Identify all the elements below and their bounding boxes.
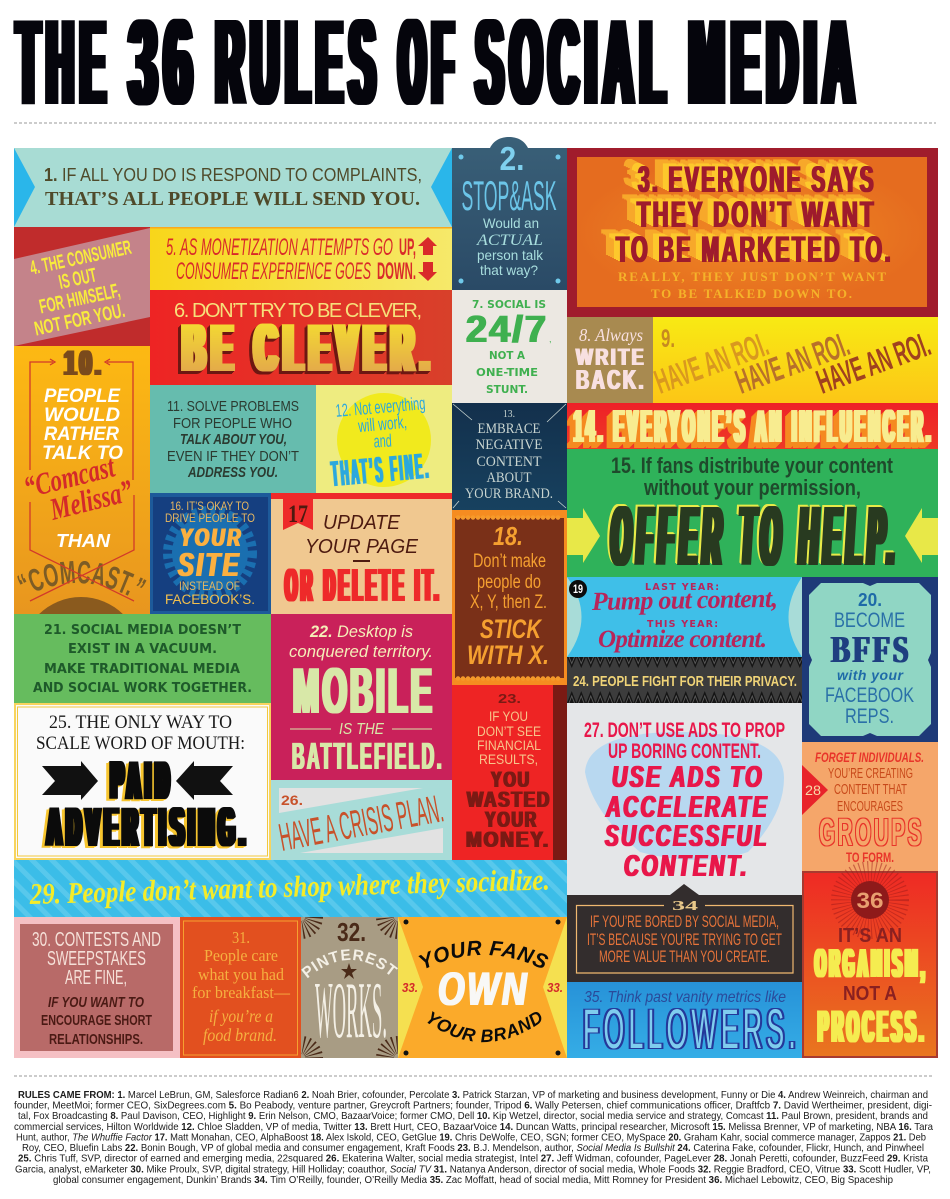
text: rule 34: 34 xyxy=(672,899,698,914)
panel: rule 30 xyxy=(14,917,180,1058)
text: rule 20: REPS. xyxy=(845,705,894,728)
text: rule 11: FOR PEOPLE WHO xyxy=(173,416,292,432)
text: rule 18: Don’t make xyxy=(473,551,546,572)
text: rule 10: “COMCAST.” xyxy=(17,561,146,596)
panel: rule 19 xyxy=(567,577,802,657)
sunburst badge: 36 xyxy=(856,888,884,913)
text: rule 1: 1. IF ALL YOU DO IS RESPOND TO COMPLAINTS, xyxy=(44,165,422,185)
text: rule 11: TALK ABOUT YOU, xyxy=(180,432,287,448)
starburst xyxy=(168,511,252,595)
text: rule 10: “Comcast xyxy=(20,448,119,505)
text: rule 31: if you’re a xyxy=(209,1006,273,1026)
credits text block: 25. Chris Tuff, SVP, director of earned and emerging media, 22squared 26. Ekaterina Walter, social media strategist, Intel 27. Jeff Widman, cofounder, PageLever 28. Jonah Peretti, cofounder, BuzzFeed 29. Krista xyxy=(18,1154,928,1165)
text: rule 16: 16. IT’S OKAY TO xyxy=(170,501,249,513)
crossed-out lines xyxy=(30,495,134,601)
text: rule 5 xyxy=(166,234,416,285)
panel: rule 26 xyxy=(271,780,452,860)
text: rule 32 xyxy=(301,917,398,1055)
text: rule 23 xyxy=(466,691,551,852)
text: rule 33: YOUR BRAND xyxy=(427,1011,542,1042)
text: rule 10: PEOPLE xyxy=(44,385,121,407)
credits text block: RULES CAME FROM: 1. Marcel LeBrun, GM, Salesforce Radian6 2. Noah Brier, cofounder, Percolate 3. Patrick Starzan, VP of marketing and business development, Funny or Die 4. Andrew Weinreich, chairman and xyxy=(18,1090,928,1101)
text: rule 26: 26. xyxy=(281,792,303,808)
text: rule 17 xyxy=(285,512,442,611)
credits text block: Garcia, analyst, eMarketer 30. Mike Proulx, SVP, digital strategy, Hill Holliday; coauthor, Social TV 31. Natanya Anderson, director of social media, Whole Foods 32. Reggie Bradford, CEO, Vitrue 33. Scott Hudler, VP, xyxy=(15,1164,931,1175)
text: rule 30 xyxy=(32,929,161,1048)
dots xyxy=(404,920,560,1056)
panel: rule 36 xyxy=(802,871,938,1058)
panel: rule 11 xyxy=(150,385,316,493)
text: rule 16: INSTEAD OF xyxy=(179,581,240,593)
text: rule 21 xyxy=(33,622,252,696)
text: rule 13: NEGATIVE xyxy=(476,437,542,453)
text: rule 2: ACTUAL xyxy=(476,232,543,249)
text: rule 33: 33. xyxy=(547,980,563,995)
text: ADVERTISING. xyxy=(47,795,250,858)
text: rule 18: WITH X. xyxy=(467,640,549,670)
text: rule 30: SWEEPSTAKES xyxy=(47,948,146,970)
text: rule 12: and xyxy=(373,431,392,451)
text: rule 30: RELATIONSHIPS. xyxy=(49,1031,143,1048)
icon: up arrow xyxy=(418,237,437,255)
text: rule 7: NOT A xyxy=(489,349,525,362)
text: rule 18: 18. xyxy=(493,521,523,551)
icon: left arrow xyxy=(176,761,233,800)
panel: rule 21 xyxy=(14,614,271,703)
panel: rule 6 xyxy=(150,290,452,386)
text: HAVE A CRISIS PLAN. xyxy=(276,787,447,860)
text: rule 31 xyxy=(192,928,291,1045)
text: rule 34 xyxy=(587,899,782,966)
text: rule 2: that way? xyxy=(480,262,538,278)
text: rule 27 xyxy=(584,719,785,883)
text: rule 23: IF YOU xyxy=(489,709,528,724)
heading: rule 3 xyxy=(616,159,893,270)
panel: rule 13 xyxy=(452,403,567,510)
panel: rule 32 xyxy=(301,917,398,1058)
text: rule 4: FOR HIMSELF, xyxy=(37,280,122,318)
text: rule 2: Would an xyxy=(483,215,539,231)
icon: right arrow xyxy=(42,761,98,800)
text: rule 22: MOBILE xyxy=(293,654,435,727)
text: rule 34: IF YOU’RE BORED BY SOCIAL MEDIA, xyxy=(590,912,779,931)
text: rule 32: 32. xyxy=(337,917,366,947)
text: rule 7: 7. SOCIAL IS xyxy=(472,298,546,311)
text: rule 23: DON’T SEE xyxy=(477,724,541,739)
text: rule 11: ADDRESS YOU. xyxy=(187,465,278,481)
frame arrows xyxy=(30,359,133,480)
icon: right arrow xyxy=(905,508,938,563)
text: rule 19: LAST YEAR: xyxy=(645,582,719,593)
text: rule 15 lead: without your permission, xyxy=(643,475,861,500)
text: rule 12 xyxy=(330,393,432,494)
text: rule 19: Optimize content. xyxy=(598,626,767,653)
panel: rule 10 xyxy=(14,344,150,614)
text: rule 28: ENCOURAGES xyxy=(837,798,903,815)
text: rule 27: ACCELERATE xyxy=(605,789,769,824)
text: rule 26 xyxy=(276,787,447,860)
text: rule 27: 27. DON’T USE ADS TO PROP xyxy=(584,719,785,742)
text: rule 30: 30. CONTESTS AND xyxy=(32,929,161,951)
panel: rule 17 xyxy=(271,493,452,614)
text: rule 33: YOUR FANS xyxy=(418,940,548,968)
panel: rule 18 xyxy=(452,510,567,685)
text: rule 36: IT’S AN xyxy=(838,925,902,947)
text: THAT’S FINE. xyxy=(330,445,432,494)
badge: 19 xyxy=(569,580,587,598)
text: rule 7: STUNT. xyxy=(486,383,528,396)
text: rule 21: EXIST IN A VACUUM. xyxy=(68,641,217,657)
text: rule 16: DRIVE PEOPLE TO xyxy=(165,513,255,525)
text: rule 31: 31. xyxy=(232,928,250,947)
credits text block: Hunt, author, The Whuffie Factor 17. Matt Monahan, CEO, AlphaBoost 18. Alex Iskold, CEO, GetGlue 19. Chris DeWolfe, CEO, SGN; former CEO, MySpace 20. Graham Kahr, social commerce manager, Zappos 21. Deb xyxy=(16,1132,926,1144)
text: rule 23: MONEY. xyxy=(466,827,550,852)
text: rule 27: SUCCESSFUL xyxy=(605,818,769,853)
text: rule 10: THAN xyxy=(56,531,111,551)
subtext: rule 3: TO BE TALKED DOWN TO. xyxy=(651,286,852,301)
text: rule 30: ARE FINE, xyxy=(65,967,127,989)
text: rule 23: FINANCIAL xyxy=(477,738,541,753)
badge: 19: 19 xyxy=(573,582,583,596)
text: rule 2: person talk xyxy=(477,247,544,263)
credits text block: global consumer engagement, Dunkin’ Brands 34. Tim O’Reilly, founder, O’Reilly Media 35. Zac Moffatt, head of social media, Mitt Romney for President 36. Michael Lebowitz, CEO, Big Spaceship xyxy=(53,1175,893,1186)
text: rule 6 lead: 6. DON’T TRY TO BE CLEVER, xyxy=(174,300,422,322)
text: rule 27: USE ADS TO xyxy=(612,759,764,794)
panel: rule 23 xyxy=(452,685,567,860)
text: rule 17: YOUR PAGE xyxy=(305,536,419,558)
text: rule 8: 8. Always xyxy=(579,325,643,345)
text: rule 25 lead: SCALE WORD OF MOUTH: xyxy=(36,733,245,754)
text: rule 28: TO FORM. xyxy=(846,850,894,865)
text: rule 9: 9. xyxy=(661,325,675,353)
panel: rule 16 xyxy=(150,493,271,614)
panel: rule 15 xyxy=(567,449,938,583)
text: rule 35 xyxy=(583,989,800,1060)
credits text block xyxy=(14,1090,933,1186)
text: rule 22: 22. Desktop is xyxy=(309,622,413,641)
text: rule 24: 24. PEOPLE FIGHT FOR THEIR PRIVACY. xyxy=(573,673,797,690)
text: rule 21: MAKE TRADITIONAL MEDIA xyxy=(44,661,241,677)
text: rule 7: ONE-TIME xyxy=(476,366,538,379)
text: rule 10: Melissa” xyxy=(46,473,136,527)
panel: rule 2 xyxy=(452,137,567,290)
text: WORKS. xyxy=(315,967,387,1055)
text: rule 29: 29. People don’t want to shop where they socialize. xyxy=(28,863,550,911)
text: rule 13: ABOUT xyxy=(486,470,532,486)
text: rule 1: THAT’S ALL PEOPLE WILL SEND YOU. xyxy=(45,188,420,210)
text: rule 7 xyxy=(466,298,552,396)
text: rule 30: ENCOURAGE SHORT xyxy=(41,1012,152,1029)
panel: rule 31 xyxy=(180,917,301,1058)
text: rule 4: 4. THE CONSUMER xyxy=(28,237,134,280)
side triangles xyxy=(398,917,567,1058)
text: rule 36 xyxy=(815,925,928,1052)
text: rule 9: HAVE AN ROI. xyxy=(650,325,774,402)
subtext: rule 3: REALLY, THEY JUST DON’T WANT xyxy=(618,269,886,284)
text: rule 31: food brand. xyxy=(203,1025,277,1045)
text: rule 15 lead: 15. If fans distribute your content xyxy=(611,453,894,478)
panel: rule 27 xyxy=(567,703,802,895)
text: STOP&ASK xyxy=(462,172,556,219)
text: rule 8: WRITE xyxy=(576,344,646,371)
text: rule 22: conquered territory. xyxy=(289,642,433,661)
text: rule 10: TALK TO xyxy=(42,442,123,464)
text: rule 16: FACEBOOK’S. xyxy=(165,592,255,607)
panel: rule 14 xyxy=(567,400,938,452)
flag: 17 xyxy=(288,501,308,528)
panel: rule 35 xyxy=(567,982,802,1060)
text: rule 15 lead xyxy=(611,453,894,500)
text: rule 19: Pump out content, xyxy=(591,584,778,616)
text: rule 8 xyxy=(576,325,646,395)
panel: rule 5 xyxy=(150,227,452,290)
icon: left arrow xyxy=(567,508,600,563)
text: rule 27: UP BORING CONTENT. xyxy=(608,740,761,763)
text: OR DELETE IT. xyxy=(285,559,442,611)
text: rule 2: 2. xyxy=(500,140,524,177)
text: rule 33: 33. xyxy=(402,980,418,995)
text: rule 11 xyxy=(167,399,299,481)
text: rule 20 xyxy=(825,590,914,728)
text: rule 9 xyxy=(650,325,936,402)
text: rule 11: EVEN IF THEY DON’T xyxy=(167,449,299,465)
panel: rule 34 xyxy=(567,884,802,982)
text: rule 19: THIS YEAR: xyxy=(647,619,718,630)
text: rule 31: for breakfast— xyxy=(192,983,291,1002)
text: rule 5: 5. AS MONETIZATION ATTEMPTS GO xyxy=(166,234,393,261)
text: rule 20: FACEBOOK xyxy=(825,684,914,707)
text: rule 35: 35. Think past vanity metrics like xyxy=(584,989,786,1006)
sunburst badge xyxy=(842,872,898,928)
text: paid advertising: PAID xyxy=(111,749,174,811)
text: rule 1 xyxy=(44,165,422,210)
text: rule 10 xyxy=(17,344,146,596)
text: rule 13: YOUR BRAND. xyxy=(465,486,553,502)
text: rule 33: OWN xyxy=(438,962,529,1015)
text: rule 13: EMBRACE xyxy=(478,421,540,437)
panel: rule 28 xyxy=(802,742,938,871)
badge: 28: 28 xyxy=(805,782,821,798)
panel: rule 5: DOWN. xyxy=(377,258,416,285)
text: BE CLEVER. xyxy=(183,310,436,386)
text: rule 25 lead xyxy=(36,712,245,754)
ribbon notches xyxy=(14,148,452,227)
panel: rule 20 xyxy=(802,577,938,742)
title xyxy=(17,0,861,130)
text: rule 22 xyxy=(289,622,444,778)
corner dots xyxy=(458,154,560,284)
credits text block: tal, Fox Broadcasting 8. Paul Davison, CEO, Highlight 9. Erin Nelson, CMO, BazaarVoice; former CMO, Dell 10. Kip Wetzel, director, social media service and strategy, Comcast 11. Paul Brown, president, brands and xyxy=(18,1111,928,1122)
panel: rule 5: UP, xyxy=(399,234,416,261)
text: rule 13 xyxy=(465,408,553,502)
text: rule 20: BECOME xyxy=(834,609,905,632)
text: rule 11: 11. SOLVE PROBLEMS xyxy=(167,399,299,415)
text: rule 36: NOT A xyxy=(843,983,897,1005)
text: rule 17: UPDATE xyxy=(323,512,401,534)
blob xyxy=(585,732,784,860)
text: rule 23: 23. xyxy=(498,691,521,706)
text: rule 27: CONTENT. xyxy=(624,848,749,883)
panel: rule 12 xyxy=(316,385,452,494)
panel: rule 8 xyxy=(567,317,653,403)
panel: rule 1 xyxy=(14,148,452,227)
text: rule 34: MORE VALUE THAN YOU CREATE. xyxy=(599,947,770,966)
text: rule 25 lead: 25. THE ONLY WAY TO xyxy=(49,712,232,733)
panel: rule 25 xyxy=(14,703,271,860)
text: rule 2 xyxy=(462,140,556,278)
panel: rule 29 xyxy=(14,860,567,917)
text: rule 12: will work, xyxy=(357,412,408,436)
text: rule 23: YOUR xyxy=(485,807,538,832)
text: rule 33 xyxy=(402,940,563,1042)
credits text block: Roy, CEO, Bluefin Labs 22. Bonin Bough, VP of global media and consumer engagement, Kraft Foods 23. B.J. Mendelson, author, Social Media Is Bullshit 24. Caterina Fake, cofounder, Flickr, Hunch, and Pinwheel xyxy=(22,1143,924,1154)
text: rule 23: RESULTS, xyxy=(479,752,538,767)
circle shape xyxy=(39,597,123,614)
text: rule 16: YOUR xyxy=(180,524,243,552)
panel: rule 4 xyxy=(14,227,150,346)
text: rule 18: people do xyxy=(477,572,541,593)
icon: down arrow xyxy=(418,262,437,281)
corner bursts xyxy=(302,917,398,1058)
text: rule 8: BACK. xyxy=(576,364,646,395)
text: rule 28: CONTENT THAT xyxy=(834,781,907,798)
text: rule 10: RATHER xyxy=(44,423,119,445)
text: rule 7: , xyxy=(549,334,552,344)
text: rule 20: with your xyxy=(837,667,905,683)
text: rule 4 xyxy=(28,237,134,340)
text: rule 12: 12. Not everything xyxy=(335,393,426,421)
panel: rule 33 xyxy=(398,917,567,1058)
panel: rule 3 xyxy=(567,148,938,317)
text: rule 20: BFFS xyxy=(831,629,911,671)
text: rule 21: 21. SOCIAL MEDIA DOESN’T xyxy=(44,622,242,638)
text: rule 31: People care xyxy=(204,946,278,965)
text: rule 18: STICK xyxy=(480,614,543,644)
text: rule 28 xyxy=(815,749,924,865)
text: rule 19 xyxy=(591,582,778,653)
text: rule 23: WASTED xyxy=(467,787,551,812)
text: BATTLEFIELD. xyxy=(292,736,444,778)
panel: rule 9 xyxy=(650,317,938,403)
credits text block: commercial services, Hilton Worldwide 12. Chloe Sladden, VP of media, Twitter 13. Brett Hurt, CEO, BazaarVoice 14. Duncan Watts, principal researcher, Microsoft 15. Melissa Brenner, VP of marketing, NBA 16. Tara xyxy=(14,1122,933,1133)
panel: rule 24 xyxy=(567,657,802,703)
panel: rule 7 xyxy=(452,290,567,403)
credits text block: founder, MeetMoi; former CEO, SixDegrees.com 5. Bo Peabody, venture partner, Greycroft Partners; founder, Tripod 6. Wally Petersen, chief communications officer, Draftfcb 7. David Wertheimer, president, digi- xyxy=(14,1101,932,1112)
text: rule 13: 13. xyxy=(503,408,515,420)
text: rule 16 xyxy=(165,501,255,607)
text: rule 31: what you had xyxy=(198,965,284,984)
text: rule 30: IF YOU WANT TO xyxy=(48,994,144,1011)
text: rule 22: IS THE xyxy=(339,721,384,738)
text: rule 5: CONSUMER EXPERIENCE GOES xyxy=(176,258,371,285)
text: rule 18 xyxy=(467,521,549,670)
text: rule 18: X, Y, then Z. xyxy=(470,592,547,613)
text: rule 10: 10. xyxy=(64,344,104,383)
text: paid advertising xyxy=(47,749,250,858)
grey bands xyxy=(279,788,443,853)
text: rule 7: 24/7 xyxy=(466,309,548,351)
text: rule 23: YOU xyxy=(491,767,531,792)
text: rule 10: WOULD xyxy=(44,404,120,426)
panel: rule 22 xyxy=(271,614,452,780)
subtext: rule 3 xyxy=(618,269,886,301)
text: rule 34: IT’S BECAUSE YOU’RE TRYING TO GET xyxy=(587,930,782,949)
text: rule 21: AND SOCIAL WORK TOGETHER. xyxy=(33,680,252,696)
text: rule 20: 20. xyxy=(858,590,882,610)
text: rule 4: NOT FOR YOU. xyxy=(32,300,127,340)
text: rule 13: CONTENT xyxy=(476,454,542,470)
text: rule 16: SITE xyxy=(178,546,241,583)
text: rule 32: PINTEREST xyxy=(301,949,398,978)
text: rule 4: IS OUT xyxy=(57,264,99,294)
